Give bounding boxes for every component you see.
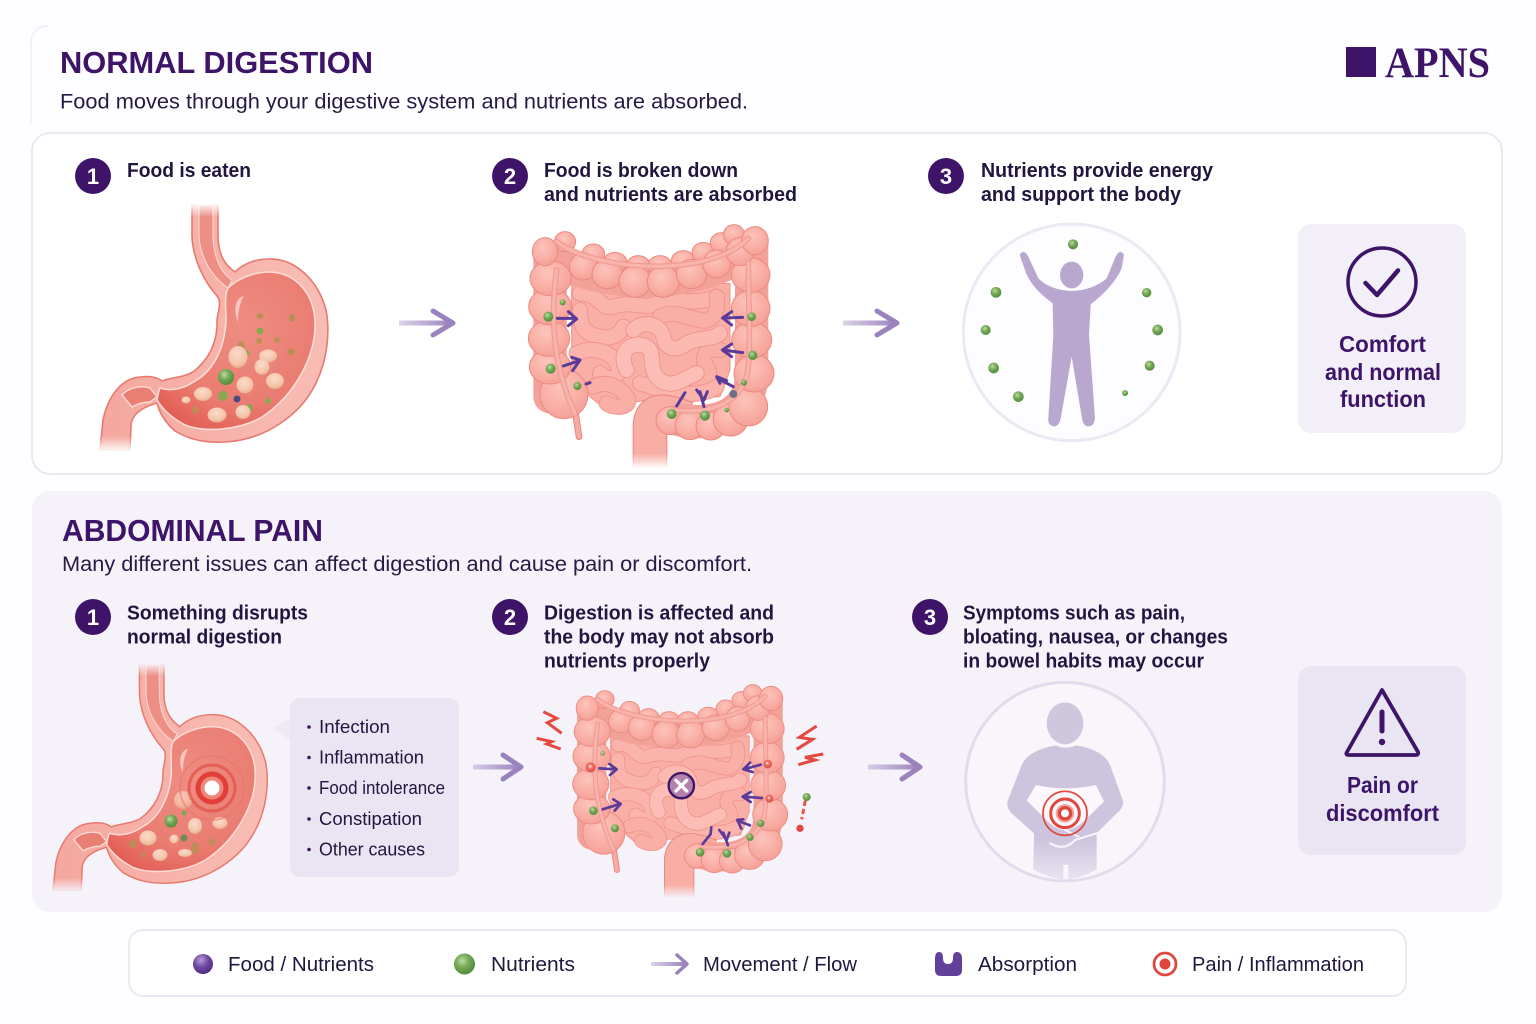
icon: pain bolts xyxy=(537,712,823,765)
step 1 heading: Food is eaten xyxy=(127,159,251,182)
callout: comfort and normal function: Comfort xyxy=(1339,331,1426,357)
subtitle: normal digestion: Food moves through your digestive system and nutrients are absorbed. xyxy=(60,90,748,114)
callout: pain or discomfort: Pain or xyxy=(1347,772,1418,798)
arrow: step 2 to 3 xyxy=(868,755,920,779)
step 3 heading: in bowel habits may occur xyxy=(963,650,1204,672)
illustration: intestines absorbing nutrients xyxy=(528,225,774,469)
step 2 heading xyxy=(492,158,797,206)
step 2 heading: the body may not absorb xyxy=(544,626,774,648)
step 3 heading xyxy=(912,599,1228,672)
step 3 heading: 3 xyxy=(940,164,952,189)
callout: pain or discomfort xyxy=(1298,666,1466,855)
step 2 heading: Food is broken down xyxy=(544,159,738,182)
step 2 heading: 2 xyxy=(504,605,516,630)
step 3 heading xyxy=(928,158,1214,206)
panel: abdominal pain xyxy=(32,491,1502,912)
header: normal digestion xyxy=(31,26,748,125)
illustration: disrupted intestines xyxy=(537,685,823,898)
panel: normal digestion xyxy=(32,133,1502,474)
logo: APNS: APNS xyxy=(1385,40,1490,87)
arrow: step 2 to 3 xyxy=(843,311,897,335)
step 3 heading: Symptoms such as pain, xyxy=(963,602,1185,624)
step 3 heading: bloating, nausea, or changes xyxy=(963,626,1228,648)
subtitle: abdominal pain: Many different issues can affect digestion and cause pain or discomfort. xyxy=(62,552,752,576)
callout: pain or discomfort: discomfort xyxy=(1326,800,1439,826)
legend item: absorption: Absorption xyxy=(978,954,1077,976)
callout: causes list xyxy=(273,698,459,877)
step 1 heading: Something disrupts xyxy=(127,602,308,624)
step 3 heading: Nutrients provide energy xyxy=(981,159,1214,182)
arrow: step 1 to 2 xyxy=(473,755,521,779)
legend xyxy=(129,930,1406,996)
icon: pain rings in stomach xyxy=(180,756,244,820)
legend item: food / nutrients: Food / Nutrients xyxy=(228,954,374,976)
step 2 heading xyxy=(492,599,774,672)
illustration: inflamed stomach xyxy=(49,663,267,892)
illustration: stomach with food xyxy=(96,203,328,452)
callout: comfort and normal function: function xyxy=(1340,386,1426,412)
arrow: step 1 to 2 xyxy=(399,311,453,335)
step 1 heading xyxy=(75,158,251,194)
step 2 heading: 2 xyxy=(504,164,516,189)
step 2 heading: nutrients properly xyxy=(544,650,711,672)
legend item: movement / flow: Movement / Flow xyxy=(703,954,858,976)
callout: comfort and normal function: and normal xyxy=(1325,359,1441,385)
step 3 heading: 3 xyxy=(924,605,936,630)
step 2 heading: Digestion is affected and xyxy=(544,602,774,624)
icon: blocked absorption xyxy=(669,773,694,798)
legend item: pain / inflammation: Pain / Inflammation xyxy=(1192,954,1364,976)
illustration: person with abdominal pain xyxy=(966,682,1164,881)
step 1 heading: 1 xyxy=(87,164,99,189)
step 1 heading: normal digestion xyxy=(127,626,282,648)
legend item: nutrients: Nutrients xyxy=(491,954,575,976)
step 1 heading: 1 xyxy=(87,605,99,630)
step 3 heading: and support the body xyxy=(981,183,1182,206)
illustration: healthy person with nutrients xyxy=(963,224,1180,441)
callout: comfort and normal function xyxy=(1298,224,1466,433)
callout: causes list: Constipation xyxy=(319,809,422,829)
legend item: nutrients xyxy=(454,954,575,976)
callout: causes list: Other causes xyxy=(319,840,425,860)
icon: pain rings on abdomen xyxy=(1043,791,1087,835)
step 2 heading: and nutrients are absorbed xyxy=(544,183,797,206)
title: abdominal pain: ABDOMINAL PAIN xyxy=(62,513,323,548)
callout: causes list: Infection xyxy=(319,717,390,737)
legend item: absorption xyxy=(935,952,1077,976)
title: normal digestion: NORMAL DIGESTION xyxy=(60,45,373,80)
logo: APNS xyxy=(1346,40,1490,87)
callout: causes list: Food intolerance xyxy=(319,778,445,798)
step 1 heading xyxy=(75,599,308,648)
icon: check mark xyxy=(1348,248,1416,316)
icon: warning triangle xyxy=(1346,690,1418,755)
callout: causes list: Inflammation xyxy=(319,748,424,768)
